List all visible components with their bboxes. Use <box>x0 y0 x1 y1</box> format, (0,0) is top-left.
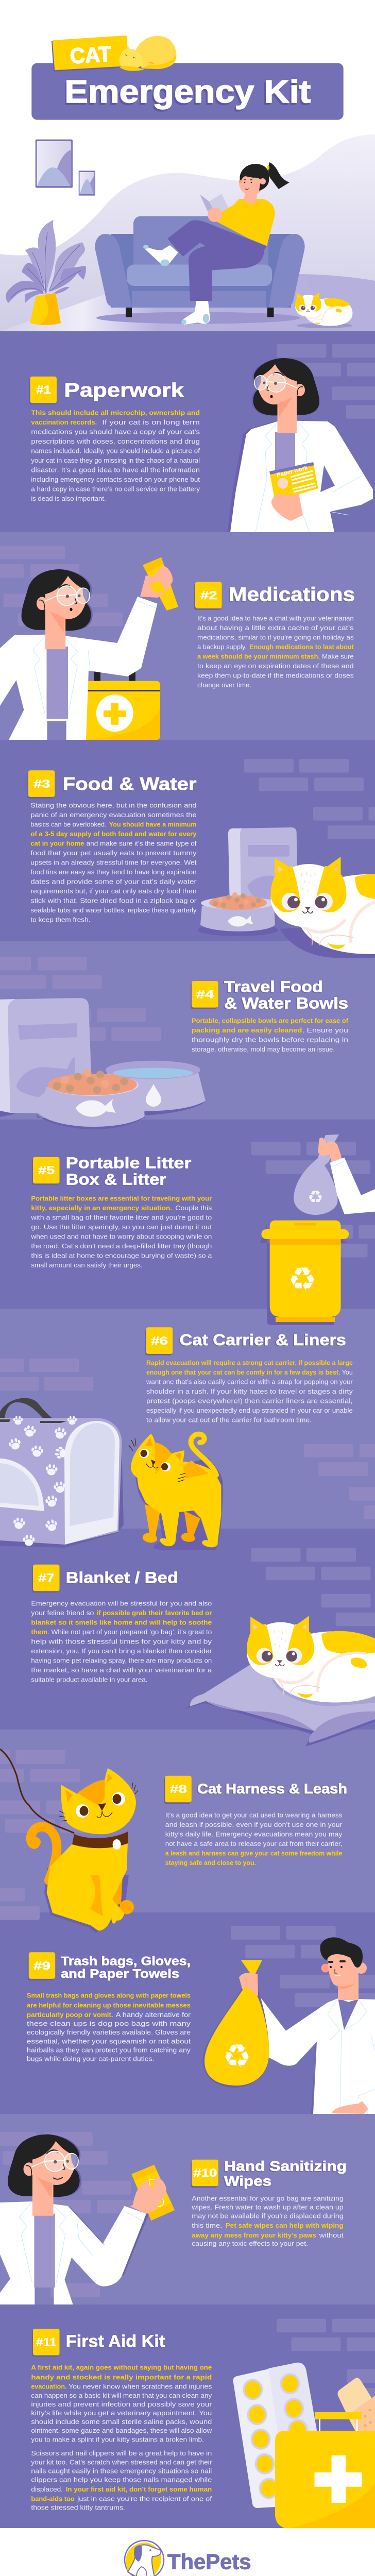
food bowl with kibble <box>36 1069 145 1129</box>
body text: panic of an emergency evacuation sometimes the <box>30 811 197 819</box>
heading <box>32 1154 191 1188</box>
body text: want one that’s also easily carried or with a strap for popping on your <box>146 1378 353 1385</box>
vet holding paperwork <box>227 358 373 532</box>
body text: . Ensure you <box>302 1027 348 1034</box>
panel: #9 Trash bags, Gloves, and Paper Towels <box>0 1912 375 2114</box>
panel: #8 Cat Harness & Leash <box>0 1730 375 1933</box>
heading: #4 <box>196 988 215 1001</box>
body text: Pet safe wipes can help with wiping <box>226 2222 344 2229</box>
panel: #1 Paperwork <box>0 331 375 532</box>
heading: Travel Food <box>224 978 323 996</box>
body text: medications you should have a copy of your cat’s <box>31 429 200 436</box>
woman reading <box>143 162 289 325</box>
heading <box>194 582 355 610</box>
body text: Another essential for your go bag are sanitizing <box>192 2195 344 2202</box>
heading: & Water Bowls <box>224 994 348 1012</box>
wall pictures <box>36 140 95 196</box>
body text: of a 3-5 day supply of both food and water for every <box>30 831 197 838</box>
body text: suitable product available in your area. <box>31 1676 147 1684</box>
body text: change over time. <box>197 682 251 689</box>
heading: #5 <box>38 1164 55 1177</box>
icon: cat on a leash <box>0 1749 138 1933</box>
heading: Hand Sanitizing <box>224 2158 347 2174</box>
body text: the road. Cat’s don’t need a deep-filled litter tray (though <box>31 1243 212 1250</box>
body text: should include some small sterile saline packs, wound <box>31 2418 212 2426</box>
heading: #8 <box>170 1783 187 1795</box>
icon: white and yellow cat <box>247 1616 375 1706</box>
food bowl with kibble <box>198 892 278 936</box>
clipboard labelled Paper work: Paper work <box>276 465 309 479</box>
header panel <box>0 36 375 331</box>
body text: packing and are easily cleaned <box>192 1027 302 1034</box>
body text: displaced. <box>31 2486 63 2493</box>
footer: ThePets logo: ThePets <box>167 2550 251 2574</box>
body text: including emergency contacts saved on your phone but <box>31 476 200 483</box>
panel: #3 Food & Water <box>0 740 375 958</box>
body text: a week should be your minimum stash. <box>197 653 320 660</box>
title banner: Emergency Kit <box>64 74 311 110</box>
heading: Wipes <box>224 2173 271 2189</box>
icon: dog and cat logo <box>125 2540 164 2576</box>
body text <box>146 1359 353 1423</box>
bandage <box>338 2378 375 2468</box>
body text: small amount can satisfy their urges. <box>31 1262 143 1269</box>
water bowl <box>106 1061 206 1115</box>
body text: thoroughly dry the bowls before replacing in <box>192 1037 348 1044</box>
body text: requirements but, if your cat only eats dry food then <box>30 888 197 895</box>
icon: standing yellow cat <box>129 1434 223 1550</box>
pet carrier <box>0 1398 124 1548</box>
body text: and make sure it’s the same type of <box>87 840 197 847</box>
body text: if possible grab their favorite bed or <box>97 1609 212 1617</box>
vet holding ointment tube <box>0 557 178 740</box>
yellow CAT tag: CAT <box>69 42 112 68</box>
body text: about having a little extra cache of your cat’s <box>197 624 354 632</box>
heading: Cat Harness & Leash <box>197 1781 347 1797</box>
vet holding yellow trash bag <box>202 1937 375 2114</box>
body text: It’s a good idea to have a chat with your veterinarian <box>197 615 354 622</box>
body text: It’s a good idea to get your cat used to wearing a harness <box>165 1812 342 1819</box>
body text: A first aid kit, again goes without saying but having one <box>31 2364 212 2371</box>
body text: without <box>319 2232 344 2239</box>
heading <box>28 1952 191 1981</box>
body text: especially if you unexpectedly end up stranded in your car or unable <box>146 1407 353 1414</box>
heading <box>27 770 197 799</box>
body text: not have a safe area to release your cat from their carrier, <box>165 1840 342 1848</box>
heading: Trash bags, Gloves, <box>61 1954 191 1968</box>
clipboard labelled Paper work <box>269 462 318 501</box>
body text: evacuation. <box>31 2383 67 2391</box>
body text: with a small bag of their favorite litter and you’re good to <box>30 1214 212 1222</box>
body text: sealable tubs and water bottles, replace these quarterly <box>30 907 197 914</box>
body text: vaccination records. <box>31 419 97 426</box>
heading: First Aid Kit <box>66 2332 165 2351</box>
body text: causing any toxic effects to your pet. <box>192 2240 308 2247</box>
body text: this time. <box>192 2222 222 2229</box>
heading: #10 <box>193 2166 217 2179</box>
body text: staying safe and close to you. <box>165 1859 256 1867</box>
body text: Emergency evacuation will be stressful for you and also <box>31 1600 212 1607</box>
body text: upsets in an already stressful time for everyone. Wet <box>30 859 197 866</box>
body text: handy and stocked is really important for a rapid <box>31 2374 212 2381</box>
panel: #5 Portable Litter Box & Litter <box>0 1120 375 1325</box>
icon: potted plant <box>6 220 86 325</box>
body text <box>30 802 197 923</box>
hand <box>271 494 303 521</box>
cushion <box>185 1664 375 1747</box>
body text: you to make a splint if your kitty sustains a broken limb. <box>31 2436 204 2444</box>
body text: Portable, collapsible bowls are perfect for ease of <box>192 1018 349 1025</box>
body text: these clean-ups is dog poo bags with many <box>27 2020 191 2027</box>
body text <box>30 1195 212 1269</box>
body text: the market, so have a chat with your veterinarian for a <box>31 1667 212 1674</box>
heading <box>32 1565 178 1592</box>
body text: your cat in case they go missing in the chaos of a natural <box>31 457 200 464</box>
body text <box>31 2364 212 2512</box>
body text: food tins are easy as they tend to have long expiration <box>30 869 197 876</box>
heading <box>145 1327 346 1355</box>
body text: nails caught easily in these emergency situations so nail <box>31 2468 212 2475</box>
yellow recycling bin: ♻ <box>288 1260 317 1298</box>
body text: particularly poop or vomit. <box>27 2011 113 2019</box>
body text: Small trash bags and gloves along with paper towels <box>27 1992 191 1999</box>
yellow CAT tag <box>52 36 129 72</box>
body text: wipes. Fresh water to wash up after a clean up <box>191 2204 344 2211</box>
heading <box>29 377 184 404</box>
icon: white and yellow cat on floor <box>295 292 352 328</box>
sofa <box>95 216 305 317</box>
woman head <box>22 569 93 649</box>
footer: ThePets logo <box>125 2540 251 2576</box>
yellow recycling bin <box>260 1221 349 1325</box>
food bag <box>228 827 298 907</box>
body text: Scissors and nail clippers will be a great help to have in <box>31 2450 212 2457</box>
body text: go. Use the litter sparingly, so you can just dump it out <box>31 1224 212 1231</box>
body text: medications, similar to if you’re going on holiday as <box>197 634 354 641</box>
body text <box>27 1992 191 2062</box>
body text: cat in your home <box>30 840 84 847</box>
woman head <box>251 358 319 433</box>
heading: #9 <box>33 1959 50 1972</box>
body text: having some pet relaxing spray, there are many products on <box>31 1657 212 1665</box>
body text: clippers can help you keep those nails managed while <box>31 2477 212 2484</box>
body text: kitty’s daily life. Emergency evacuations mean you may <box>165 1831 343 1838</box>
first aid kit <box>275 2412 375 2528</box>
panel: #4 Travel Food & Water Bowls <box>0 941 375 1129</box>
body text: basics can be overlooked. <box>30 821 107 828</box>
body text: when used and not have to worry about scooping while on <box>30 1233 212 1241</box>
body text: bugs while doing your cat-parent duties. <box>27 2055 154 2062</box>
body text: help with those stressful times for your kitty and by <box>31 1638 212 1646</box>
body text <box>191 2195 344 2247</box>
panel: #7 Blanket / Bed <box>0 1529 375 1747</box>
body text: This should include all microchip, ownership and <box>31 410 200 417</box>
body text: . You <box>338 1369 353 1376</box>
blister pack of pills <box>233 2363 330 2508</box>
body text: Make sure <box>322 653 354 660</box>
body text: to keep them fresh. <box>30 916 90 923</box>
body text: band-aids too <box>31 2496 75 2503</box>
heading: Cat Carrier & Liners <box>180 1331 346 1349</box>
body text: In your first aid kit, don’t forget some human <box>66 2486 212 2493</box>
room background wave <box>0 134 375 331</box>
icon: white and yellow cat <box>271 857 375 958</box>
heading: #1 <box>36 383 51 396</box>
body text: If your cat is on long term <box>102 419 200 426</box>
body text: enough one that your cat can be comfy in for a few days is best <box>146 1369 339 1376</box>
body text: Enough medications to last about <box>249 643 354 651</box>
body text: Couple this <box>175 1205 212 1212</box>
heading <box>191 2158 347 2189</box>
first aid kit <box>77 671 160 740</box>
body text: this is ideal at home to encourage burying of waste) so a <box>31 1252 212 1260</box>
body text: is dead is also important. <box>31 495 106 502</box>
body text: to allow your cat out of the carrier for bathroom time. <box>146 1416 312 1423</box>
heading: #2 <box>200 589 217 602</box>
vet holding yellow trash bag: ♻ <box>223 2037 251 2075</box>
body text <box>197 615 354 689</box>
vet holding wipes packet <box>0 2134 175 2304</box>
heading: Portable Litter <box>66 1154 191 1172</box>
body text: are helpful for cleaning up those inevitable messes <box>27 2002 191 2009</box>
body text: may not be available if you’re displaced during <box>192 2213 344 2220</box>
heading: #6 <box>151 1334 168 1347</box>
body text: essential, whether your squeamish or not about <box>27 2038 191 2045</box>
heading: #11 <box>36 2336 57 2348</box>
body text: just in case you’re the recipient of one of <box>77 2496 212 2503</box>
recycling bag held in hand: ♻ <box>308 1187 323 1208</box>
body text: and leash if possible, even if you don’t use one in your <box>165 1821 342 1828</box>
panel: #6 Cat Carrier & Liners <box>0 1309 375 1550</box>
body text <box>165 1812 343 1867</box>
body text: shoulder in a rush. If your kitty hates to travel or stages a dirty <box>146 1388 353 1395</box>
body text <box>192 1018 349 1053</box>
body text: your feline friend so <box>31 1609 94 1617</box>
body text: them <box>31 1629 47 1636</box>
body text: kitty, especially in an emergency situation. <box>31 1205 172 1212</box>
icon: sleeping yellow cat <box>120 36 177 71</box>
body text <box>31 1600 212 1684</box>
body text: storage, otherwise, mold may become an issue. <box>192 1046 335 1053</box>
recycling bag held in hand <box>294 1134 375 1215</box>
body text: injuries and prevent infection and possibly save your <box>31 2401 212 2408</box>
body text: Rapid evacuation will require a strong cat carrier, if possible a large <box>146 1359 353 1366</box>
body text: to keep an eye on expiration dates of these and <box>197 663 354 670</box>
body text: . While not part of your prepared ‘go bag’, it’s great to <box>47 1629 212 1636</box>
body text: a backup supply. <box>197 643 247 651</box>
heading: Food & Water <box>63 774 197 794</box>
heading: and Paper Towels <box>61 1967 179 1981</box>
body text: Portable litter boxes are essential for traveling with your <box>31 1195 212 1202</box>
heading <box>191 978 348 1012</box>
panel: #2 Medications <box>0 532 375 740</box>
heading: #3 <box>33 777 50 790</box>
heading: #7 <box>38 1571 55 1584</box>
body text: stick with that. Store dried food in a ziplock bag or <box>30 897 197 904</box>
food bag <box>0 998 93 1117</box>
heading <box>164 1776 347 1804</box>
heading: Box & Litter <box>66 1170 166 1188</box>
body text: those stressed kitty tantrums. <box>31 2504 125 2512</box>
body text <box>31 410 200 502</box>
body text: ointment, some gauze and bandages, these will also allow <box>31 2427 212 2434</box>
heading <box>32 2329 165 2357</box>
title banner <box>31 63 344 120</box>
body text: A handy alternative for <box>116 2011 191 2019</box>
body text: extension, you. If you can’t bring a blanket then consider <box>31 1648 212 1655</box>
body text: You should have a minimum <box>109 821 197 828</box>
body text: food that your pet usually eats to prevent tummy <box>30 850 197 857</box>
body text: Stating the obvious here, but in the confusion and <box>30 802 197 809</box>
panel: #10 Hand Sanitizing Wipes <box>0 2114 375 2304</box>
body text: can happen so a basic kit will mean that you can clean any <box>31 2392 212 2399</box>
body text: a leash and harness can give your cat some freedom while <box>165 1850 342 1857</box>
panel: #11 First Aid Kit <box>0 2304 375 2528</box>
heading: Blanket / Bed <box>66 1569 178 1587</box>
body text: dates and provide some of your cat’s daily water <box>30 878 197 885</box>
heading: Medications <box>229 584 355 606</box>
body text: a hard copy in case there’s no cell service or the battery <box>31 486 200 493</box>
body text: You never know when scratches and injuries <box>69 2383 212 2391</box>
body text: your kit too. Cat’s scratch when stressed and can get their <box>31 2459 212 2466</box>
body text: blanket so it smells like home and will help to soothe <box>31 1619 212 1626</box>
body text: kitty’s life while you get a veterinary appointment. You <box>31 2410 212 2417</box>
body text: away any mess from your kitty’s paws <box>192 2232 316 2239</box>
body text: prescriptions with doses, concentrations and drug <box>31 438 200 445</box>
heading: Paperwork <box>64 380 184 401</box>
body text: ecologically friendly varieties available. Gloves are <box>27 2029 191 2036</box>
floor shadow <box>96 312 300 324</box>
body text: protest (poops everywhere!) then carrier liners are essential, <box>146 1397 353 1404</box>
body text: hairballs as they can protect you from catching any <box>27 2046 191 2054</box>
body text: keep them up-to-date if the medications or doses <box>197 672 354 680</box>
body text: disaster. It’s a good idea to have all the information <box>31 467 200 474</box>
body text: names included. Ideally, you should include a picture of <box>31 448 200 455</box>
